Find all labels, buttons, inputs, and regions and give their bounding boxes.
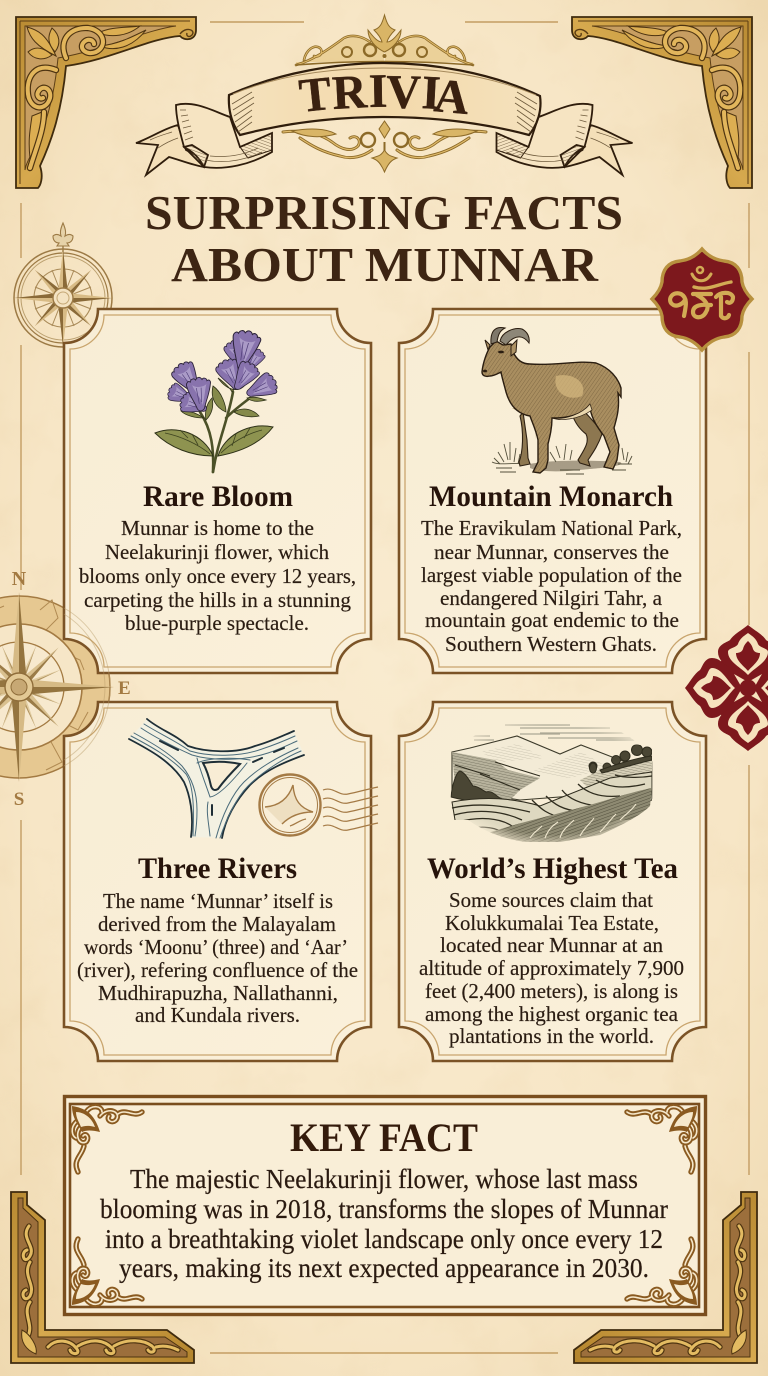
body text	[100, 1164, 668, 1283]
body text: years, making its next expected appearance in 2030.	[119, 1253, 649, 1283]
body text: (river), refering confluence of the	[77, 958, 358, 982]
emblem: red floral ornament	[685, 625, 768, 751]
body text: Southern Western Ghats.	[445, 632, 657, 656]
title	[145, 185, 623, 292]
icon: nilgiri tahr	[482, 328, 632, 474]
panel: key fact	[64, 1096, 706, 1314]
body text: The Eravikulam National Park,	[421, 516, 682, 540]
panel: rare bloom	[64, 309, 371, 673]
corner ornament top right	[572, 17, 752, 188]
banner ornament bottom	[283, 121, 486, 172]
body text: The name ‘Munnar’ itself is	[103, 889, 333, 913]
heading: KEY FACT	[290, 1115, 478, 1160]
body text	[421, 516, 682, 656]
corner ornament bottom left	[11, 1192, 194, 1363]
body text: and Kundala rivers.	[135, 1003, 300, 1027]
heading: Three Rivers	[138, 852, 297, 885]
body text: blue-purple spectacle.	[125, 611, 309, 635]
compass large: S	[14, 789, 24, 810]
icon: tea hills landscape	[451, 725, 652, 842]
body text: Kolukkumalai Tea Estate,	[445, 911, 659, 935]
title: ABOUT MUNNAR	[171, 237, 599, 292]
compass large: E	[118, 678, 131, 699]
body text	[419, 888, 684, 1048]
banner ornament top	[296, 15, 473, 65]
trivia label: TRIVIA	[297, 65, 472, 125]
icon: postmark stamp	[260, 774, 378, 836]
heading: World’s Highest Tea	[427, 852, 678, 885]
body text	[77, 889, 358, 1027]
body text: altitude of approximately 7,900	[419, 956, 684, 980]
compass small	[14, 223, 112, 347]
icon: neelakurinji flower	[155, 328, 280, 472]
body text: located near Munnar at an	[440, 933, 664, 957]
body text: blooms only once every 12 years,	[79, 564, 356, 588]
corner ornament key fact bottom left	[72, 1239, 142, 1305]
body text: The majestic Neelakurinji flower, whose last mass	[130, 1164, 638, 1194]
body text: into a breathtaking violet landscape only once every 12	[105, 1224, 663, 1254]
body text: mountain goat endemic to the	[425, 608, 679, 632]
body text: plantations in the world.	[449, 1024, 654, 1048]
compass large	[0, 568, 131, 810]
emblem: red seal	[652, 249, 752, 350]
panel: mountain monarch	[399, 309, 706, 673]
compass large: N	[12, 568, 27, 590]
ribbon right tail	[496, 104, 632, 175]
body text: Neelakurinji flower, which	[105, 540, 329, 564]
compass faint ring over cards	[64, 608, 110, 766]
body text: carpeting the hills in a stunning	[84, 588, 352, 612]
heading: Mountain Monarch	[429, 480, 673, 513]
corner ornament key fact top left	[72, 1106, 142, 1172]
banner ribbon	[136, 63, 632, 175]
body text: feet (2,400 meters), is along is	[425, 979, 678, 1003]
body text: blooming was in 2018, transforms the slopes of Munnar	[100, 1194, 668, 1224]
body text: Munnar is home to the	[121, 516, 314, 540]
panel: three rivers	[64, 702, 378, 1061]
body text: largest viable population of the	[421, 563, 682, 587]
body text: among the highest organic tea	[425, 1002, 679, 1026]
body text: Some sources claim that	[449, 888, 653, 912]
ribbon centre band	[229, 63, 541, 135]
body text: Mudhirapuzha, Nallathanni,	[98, 981, 338, 1005]
body text: endangered Nilgiri Tahr, a	[440, 586, 663, 610]
corner ornament key fact bottom right	[627, 1239, 697, 1305]
body text: near Munnar, conserves the	[434, 540, 669, 564]
ribbon left tail	[136, 104, 272, 175]
corner ornament top left	[16, 17, 196, 188]
icon: river confluence	[129, 719, 304, 838]
body text: words ‘Moonu’ (three) and ‘Aar’	[84, 935, 348, 959]
body text	[79, 516, 356, 635]
heading: Rare Bloom	[143, 480, 293, 513]
body text: derived from the Malayalam	[98, 912, 336, 936]
title: SURPRISING FACTS	[145, 185, 623, 240]
corner ornament bottom right	[574, 1192, 757, 1363]
corner ornament key fact top right	[627, 1106, 697, 1172]
panel: world's highest tea	[399, 702, 706, 1061]
